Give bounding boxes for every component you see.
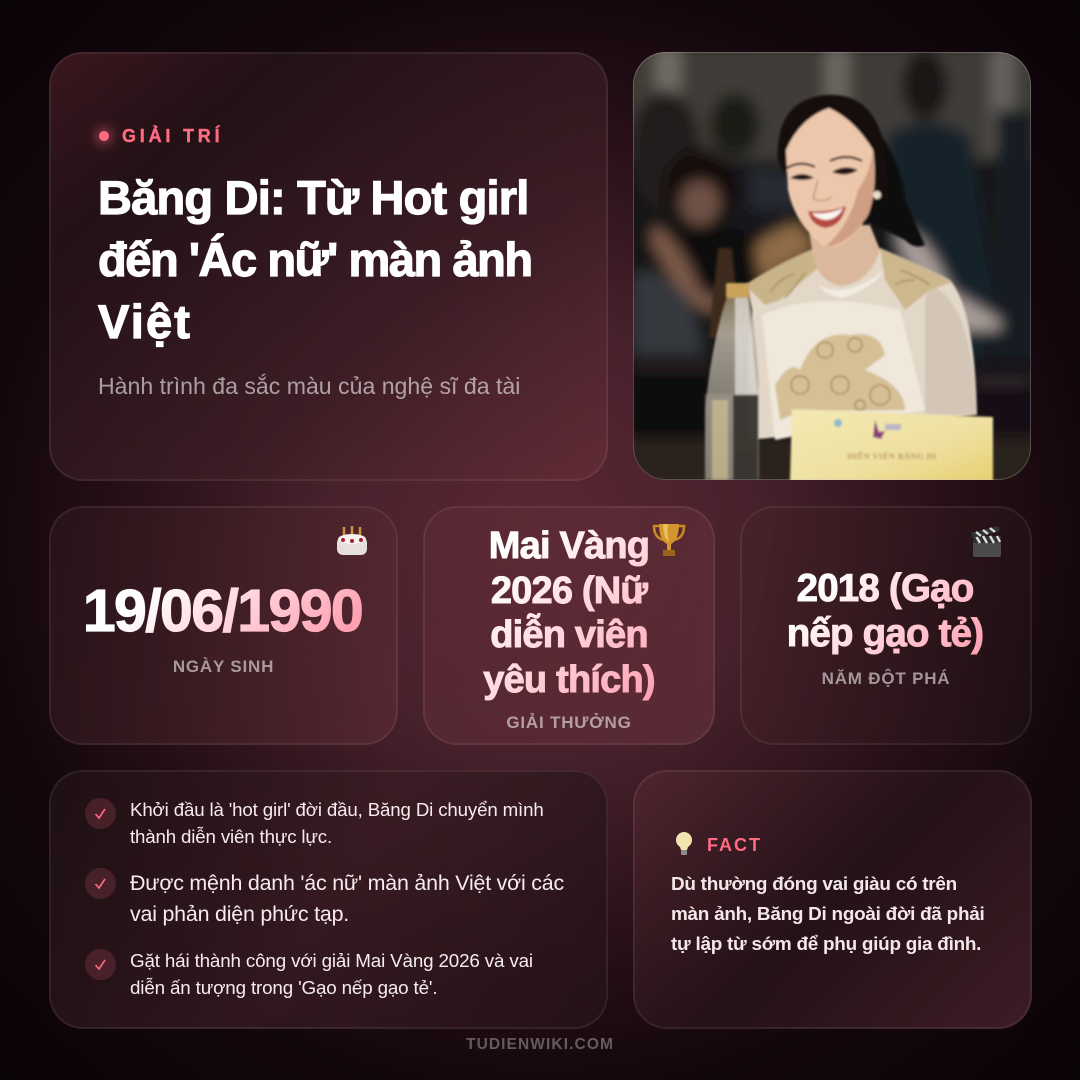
photo [633, 52, 1031, 480]
stat value: breakthrough [755, 567, 1015, 656]
point 3: diễn ấn tượng trong 'Gạo nếp gạo tẻ'. [130, 977, 437, 998]
title heading: Việt [98, 295, 192, 348]
stat value: award: Mai Vàng [489, 525, 649, 567]
point 3: Gặt hái thành công với giải Mai Vàng 2026 và vai [130, 950, 533, 971]
fact text [671, 874, 984, 955]
panel: fact [633, 770, 1032, 1029]
icon: birthday cake [337, 526, 367, 555]
earring [873, 191, 881, 199]
stat value: award: yêu thích) [483, 658, 655, 700]
panel: award [423, 506, 715, 745]
point 3 [130, 950, 533, 998]
fact text: màn ảnh, Băng Di ngoài đời đã phải [671, 904, 984, 925]
lace shoulders [747, 249, 818, 306]
check icon 3 [85, 949, 116, 980]
stat value: award: 2026 (Nữ [491, 570, 647, 612]
stat label: award: GIẢI THƯỞNG [506, 713, 632, 732]
neck [808, 225, 880, 286]
title heading: Băng Di: Từ Hot girl [98, 171, 529, 224]
water bottle [705, 283, 759, 480]
icon: trophy [652, 524, 686, 556]
panel: title [49, 52, 608, 481]
point 1: thành diễn viên thực lực. [130, 826, 332, 847]
stat value: award [435, 524, 703, 702]
name placard [790, 409, 993, 481]
category tag [90, 122, 223, 150]
hair [778, 95, 888, 200]
stat value: breakthrough: 2018 (Gạo [797, 567, 973, 610]
stat label: birth date: NGÀY SINH [173, 657, 274, 676]
subtitle: Hành trình đa sắc màu của nghệ sĩ đa tài [98, 373, 520, 399]
footer: TUDIENWIKI.COM [466, 1036, 614, 1053]
background scene [625, 45, 1045, 488]
ponytail [864, 132, 926, 248]
point 2: vai phản diện phức tạp. [130, 902, 349, 926]
point 1: Khởi đầu là 'hot girl' đời đầu, Băng Di chuyển mình [130, 799, 544, 820]
icon: clapperboard [971, 526, 1001, 557]
stat value: birth date: 19/06/1990 [83, 578, 362, 644]
point 2 [130, 871, 564, 926]
bottle behind [709, 248, 739, 338]
title heading: đến 'Ác nữ' màn ảnh [98, 233, 532, 286]
face [786, 108, 875, 247]
check icon 2 [85, 868, 116, 899]
title heading [98, 171, 532, 348]
fact heading: FACT [707, 835, 762, 855]
panel: key points [49, 770, 608, 1029]
dress [745, 248, 977, 440]
lace flowers [775, 334, 905, 420]
woman [745, 95, 977, 440]
name placard: DIỄN VIÊN BĂNG DI [847, 451, 937, 461]
stat label: breakthrough: NĂM ĐỘT PHÁ [822, 669, 950, 688]
icon: light bulb [676, 832, 692, 855]
nose [813, 180, 832, 201]
mouth [808, 206, 846, 228]
fact text: Dù thường đóng vai giàu có trên [671, 874, 957, 895]
panel: birth date [49, 506, 398, 745]
stat value: award: diễn viên [490, 614, 648, 656]
eyes [790, 174, 814, 180]
check icon 1 [85, 798, 116, 829]
stat value: breakthrough: nếp gạo tẻ) [787, 612, 983, 654]
point 2: Được mệnh danh 'ác nữ' màn ảnh Việt với các [130, 871, 564, 895]
panel: breakthrough [740, 506, 1032, 745]
category tag: GIẢI TRÍ [122, 126, 223, 146]
fact text: tự lập từ sớm để phụ giúp gia đình. [671, 934, 981, 955]
point 1 [130, 799, 544, 847]
